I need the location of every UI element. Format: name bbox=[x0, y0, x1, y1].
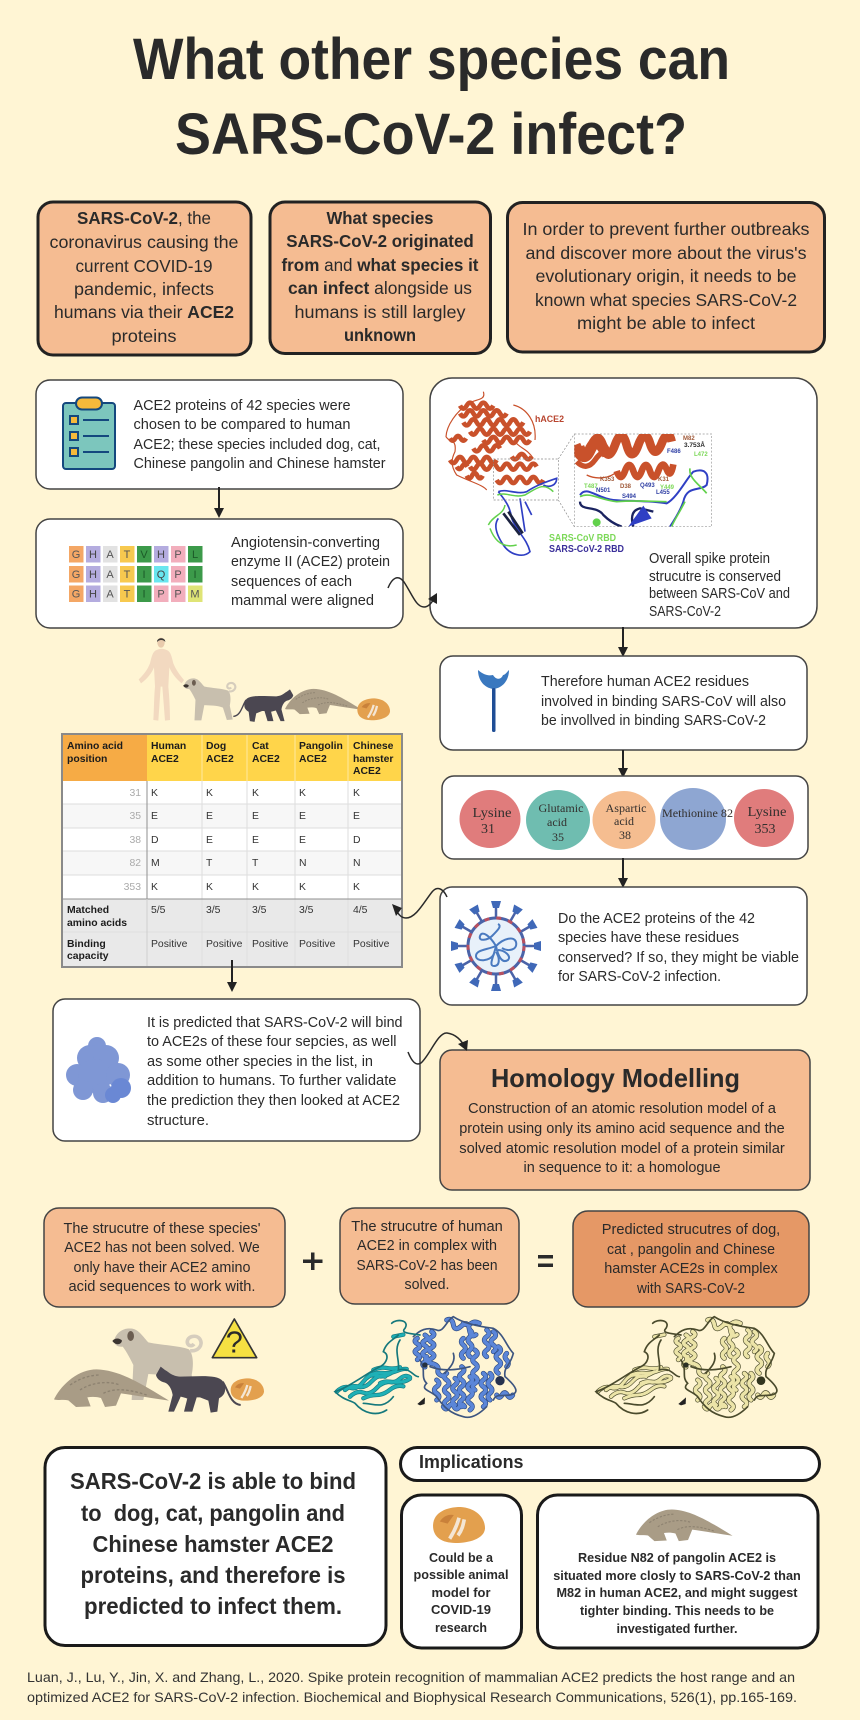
panel: unknown species: can infect alongside us bbox=[288, 278, 472, 298]
table rows: E bbox=[151, 811, 158, 822]
table rows bbox=[124, 788, 361, 893]
residue: Lysine 31 bbox=[460, 790, 520, 848]
panel: prevention rationale: evolutionary origin, it needs to be bbox=[536, 266, 796, 286]
residue: Glutamic acid 35: 35 bbox=[552, 830, 564, 844]
icon: aligned sequences: H bbox=[89, 569, 97, 581]
arrow bbox=[618, 858, 628, 888]
icon: warning question bbox=[212, 1319, 257, 1359]
table rows: M bbox=[151, 858, 160, 869]
human ACE2 ribbon bbox=[413, 1317, 516, 1417]
table header: Amino acid bbox=[67, 741, 123, 752]
panel: residues conserved question bbox=[440, 887, 807, 1005]
table rows: T bbox=[206, 858, 213, 869]
icon: aligned sequences: I bbox=[142, 569, 146, 581]
panel: SARS-CoV-2 intro bbox=[38, 202, 251, 355]
pangolin bbox=[285, 689, 362, 714]
table header: ACE2 bbox=[206, 754, 234, 765]
panel: SARS-CoV-2 intro: coronavirus causing the bbox=[50, 232, 238, 252]
illustration: predicted structure model bbox=[596, 1317, 777, 1417]
residue: Aspartic acid 38: 38 bbox=[619, 828, 631, 842]
panel: unsolved species structures: The strucutre of these species' bbox=[64, 1220, 261, 1237]
icon: aligned sequences: I bbox=[142, 588, 146, 600]
residue: Lysine 31: 31 bbox=[481, 822, 495, 837]
table summary rows: 3/5 bbox=[299, 905, 314, 916]
panel: homology modelling: in sequence to it: a homologue bbox=[524, 1159, 720, 1176]
panel: residues bbox=[442, 776, 808, 859]
panel: spike protein structure: strucutre is conserved bbox=[649, 569, 781, 585]
protein structure figure bbox=[446, 392, 712, 555]
residue: Lysine 353 bbox=[734, 789, 794, 847]
icon: protein blob bbox=[66, 1037, 131, 1103]
table header: hamster bbox=[353, 754, 393, 765]
icon: virus bbox=[451, 901, 541, 991]
panel: unknown species bbox=[270, 202, 490, 354]
panel: unknown species: SARS-CoV-2 originated bbox=[286, 231, 474, 251]
table rows: 353 bbox=[124, 882, 141, 893]
icon: aligned sequences: T bbox=[124, 569, 131, 581]
panel: prevention rationale: and discover more about the virus's bbox=[526, 243, 807, 263]
panel: hamster implication: COVID-19 bbox=[431, 1602, 491, 1617]
panel: human ACE2 residues: be invollved in binding SARS-CoV-2 bbox=[541, 712, 766, 729]
panel: pangolin implication: situated more closly to SARS-CoV-2 than bbox=[553, 1568, 801, 1583]
protein labels: Y449 bbox=[660, 485, 675, 491]
icon: aligned sequences: I bbox=[193, 569, 197, 581]
illustration: human and four animals bbox=[139, 638, 390, 722]
table summary rows: Positive bbox=[299, 939, 336, 950]
icon: ACE2 receptor bbox=[478, 670, 509, 732]
panel: prediction: to ACE2s of these four sepcies, as well bbox=[147, 1033, 396, 1050]
panel: conclusion: predicted to infect them. bbox=[84, 1593, 342, 1619]
panel: prevention rationale bbox=[508, 202, 824, 352]
panel: hamster implication: possible animal bbox=[414, 1567, 508, 1582]
panel: sequence alignment: mammal were aligned bbox=[231, 592, 374, 609]
panel: sequence alignment bbox=[36, 519, 403, 628]
table rows: 38 bbox=[129, 835, 141, 846]
protein labels: K31 bbox=[658, 477, 670, 483]
protein labels: K353 bbox=[600, 477, 615, 483]
panel: homology modelling: Construction of an atomic resolution model of a bbox=[468, 1100, 777, 1117]
table rows: E bbox=[299, 835, 306, 846]
table summary rows: amino acids bbox=[67, 918, 127, 929]
table summary rows: capacity bbox=[67, 951, 109, 962]
panel: hamster implication: model for bbox=[432, 1585, 490, 1600]
panel: conclusion: SARS-CoV-2 is able to bind bbox=[70, 1468, 356, 1494]
protein labels: Q493 bbox=[640, 483, 655, 489]
table rows: K bbox=[151, 788, 158, 799]
icon: aligned sequences: A bbox=[106, 588, 114, 600]
panel: solved human structure: SARS-CoV-2 has been bbox=[356, 1257, 498, 1274]
icon: pangolin bbox=[636, 1509, 733, 1541]
table summary rows: Positive bbox=[252, 939, 289, 950]
title: SARS-CoV-2 infect? bbox=[175, 102, 687, 167]
residue: Glutamic acid 35: acid bbox=[547, 815, 567, 829]
icon: clipboard bbox=[63, 398, 115, 469]
table summary rows: 5/5 bbox=[151, 905, 166, 916]
table rows: K bbox=[299, 788, 306, 799]
icon: aligned sequences: G bbox=[72, 549, 80, 561]
citation bbox=[27, 1669, 797, 1705]
protein labels: 3.753Å bbox=[684, 440, 705, 449]
table rows: K bbox=[299, 882, 306, 893]
panel: unknown species: unknown bbox=[344, 325, 416, 345]
panel: 42 species chosen: Chinese pangolin and Chinese hamster bbox=[134, 455, 386, 472]
panel: unknown species: from and what species it bbox=[282, 255, 479, 275]
curved arrow: residues question to table bbox=[392, 889, 447, 918]
table header: position bbox=[67, 754, 107, 765]
panel: hamster implication: Could be a bbox=[429, 1550, 494, 1565]
panel: SARS-CoV-2 intro: pandemic, infects bbox=[74, 279, 214, 299]
panel: sequence alignment: sequences of each bbox=[231, 573, 352, 590]
cat bbox=[156, 1367, 241, 1413]
panel: prediction: It is predicted that SARS-CoV-2 will bind bbox=[147, 1014, 402, 1031]
residue: Aspartic acid 38: acid bbox=[614, 814, 634, 828]
panel: prediction: structure. bbox=[147, 1112, 209, 1129]
panel: unsolved species structures: only have their ACE2 amino bbox=[74, 1259, 250, 1276]
table header: ACE2 bbox=[151, 754, 179, 765]
curved arrow: prediction to homology bbox=[408, 1033, 468, 1064]
residue: Lysine 353: Lysine bbox=[748, 805, 786, 820]
table rows: D bbox=[151, 835, 159, 846]
plus sign bbox=[303, 1252, 322, 1270]
protein labels: L472 bbox=[694, 452, 708, 458]
table header: ACE2 bbox=[252, 754, 280, 765]
icon: hamster bbox=[433, 1507, 485, 1543]
table rows: K bbox=[206, 882, 213, 893]
panel: predicted structures: Predicted strucutres of dog, bbox=[602, 1221, 780, 1238]
residue: Aspartic acid 38: Aspartic bbox=[606, 801, 646, 815]
table rows: K bbox=[353, 788, 360, 799]
panel: pangolin implication: Residue N82 of pangolin ACE2 is bbox=[578, 1550, 776, 1565]
panel: unsolved species structures: ACE2 has not been solved. We bbox=[64, 1239, 260, 1256]
table rows: E bbox=[252, 835, 259, 846]
panel: predicted structures bbox=[573, 1211, 809, 1307]
panel: SARS-CoV-2 intro: SARS-CoV-2, the bbox=[77, 208, 211, 228]
panel: SARS-CoV-2 intro: current COVID-19 bbox=[76, 256, 212, 276]
table summary rows: Positive bbox=[151, 939, 188, 950]
panel: unsolved species structures bbox=[44, 1208, 285, 1307]
panel: prevention rationale: known what species SARS-CoV-2 bbox=[535, 290, 797, 310]
panel: spike protein structure: SARS-CoV-2 bbox=[649, 604, 721, 620]
table summary rows: Positive bbox=[353, 939, 390, 950]
table: amino acid comparison bbox=[62, 734, 402, 967]
table rows: E bbox=[299, 811, 306, 822]
heading: implications: Implications bbox=[419, 1451, 524, 1472]
residue: Methionine 82 bbox=[660, 788, 733, 850]
panel: solved human structure: The strucutre of human bbox=[351, 1218, 503, 1235]
icon: aligned sequences: M bbox=[190, 588, 200, 600]
icon: aligned sequences: H bbox=[157, 549, 165, 561]
title bbox=[133, 27, 730, 167]
panel: prediction: as some other species in the list, in bbox=[147, 1053, 373, 1070]
table header: ACE2 bbox=[353, 766, 381, 777]
panel: human ACE2 residues: Therefore human ACE2 residues bbox=[541, 673, 749, 690]
residue: Aspartic acid 38 bbox=[592, 791, 656, 849]
curved arrow: alignment to structure bbox=[388, 578, 437, 607]
panel: 42 species chosen bbox=[36, 380, 403, 489]
panel: spike protein structure: Overall spike protein bbox=[649, 551, 770, 567]
panel: SARS-CoV-2 intro: humans via their ACE2 bbox=[54, 302, 234, 322]
table rows: K bbox=[206, 788, 213, 799]
panel: pangolin implication bbox=[538, 1495, 818, 1648]
panel: homology modelling: solved atomic resolution model of a protein similar bbox=[459, 1140, 785, 1157]
icon: aligned sequences: G bbox=[72, 569, 80, 581]
residue: Lysine 31: Lysine bbox=[472, 806, 512, 821]
table summary rows: 3/5 bbox=[252, 905, 267, 916]
icon: aligned sequences: P bbox=[174, 588, 182, 600]
panel: solved human structure bbox=[340, 1208, 519, 1304]
panel: solved human structure: solved. bbox=[404, 1276, 450, 1293]
illustration: animals with unknown structure bbox=[54, 1319, 264, 1413]
panel: 42 species chosen: ACE2 proteins of 42 species were bbox=[134, 397, 350, 414]
arrow bbox=[618, 750, 628, 778]
panel: hamster implication: research bbox=[435, 1620, 487, 1635]
panel: pangolin implication: M82 in human ACE2, and might suggest bbox=[556, 1585, 798, 1600]
table header: Cat bbox=[252, 741, 269, 752]
icon: aligned sequences: H bbox=[89, 588, 97, 600]
protein labels: F486 bbox=[667, 449, 681, 455]
equals sign bbox=[538, 1255, 553, 1267]
protein labels bbox=[535, 414, 708, 555]
citation: Luan, J., Lu, Y., Jin, X. and Zhang, L., 2020. Spike protein recognition of mammalian ACE2 predicts the host range and an bbox=[27, 1669, 795, 1685]
panel: 42 species chosen: chosen to be compared to human bbox=[134, 416, 350, 433]
panel: homology modelling bbox=[440, 1050, 810, 1190]
icon: aligned sequences: T bbox=[124, 588, 131, 600]
panel: prevention rationale: In order to prevent further outbreaks bbox=[522, 219, 810, 239]
table summary rows: 3/5 bbox=[206, 905, 221, 916]
table summary rows: 4/5 bbox=[353, 905, 368, 916]
panel: prediction: addition to humans. To further validate bbox=[147, 1072, 396, 1089]
table rows: 35 bbox=[129, 811, 141, 822]
panel: residues conserved question: species have these residues bbox=[558, 929, 739, 946]
panel: unsolved species structures: acid sequences to work with. bbox=[68, 1278, 256, 1295]
panel: spike protein structure: between SARS-CoV and bbox=[649, 586, 790, 602]
panel: pangolin implication: tighter binding. This needs to be bbox=[580, 1603, 774, 1618]
panel: predicted structures: hamster ACE2s in complex bbox=[604, 1260, 778, 1277]
table header: Human bbox=[151, 741, 186, 752]
icon: aligned sequences: P bbox=[174, 569, 182, 581]
icon: aligned sequences bbox=[69, 546, 202, 602]
panel: prediction: the prediction they then looked at ACE2 bbox=[147, 1092, 400, 1109]
human bbox=[139, 638, 184, 721]
panel: 42 species chosen: ACE2; these species included dog, cat, bbox=[134, 436, 380, 453]
protein labels: SARS-CoV RBD bbox=[549, 533, 616, 544]
dog bbox=[183, 678, 235, 720]
panel: sequence alignment: Angiotensin-converting bbox=[231, 534, 380, 551]
icon: aligned sequences: Q bbox=[157, 569, 166, 581]
predicted ribbon bbox=[596, 1317, 777, 1417]
table rows: E bbox=[353, 811, 360, 822]
residue: Methionine 82: Methionine 82 bbox=[662, 806, 733, 820]
panel: human ACE2 residues: involved in binding SARS-CoV will also bbox=[541, 693, 786, 710]
panel: conclusion bbox=[45, 1448, 386, 1646]
panel: predicted structures: cat , pangolin and Chinese bbox=[607, 1241, 775, 1258]
panel: hamster implication bbox=[402, 1495, 522, 1648]
cat bbox=[233, 689, 293, 722]
table header: ACE2 bbox=[299, 754, 327, 765]
table rows: K bbox=[252, 788, 259, 799]
table rows: N bbox=[299, 858, 307, 869]
table summary rows: Matched bbox=[67, 905, 109, 916]
protein labels: S494 bbox=[622, 494, 637, 500]
table summary rows: Positive bbox=[206, 939, 243, 950]
panel: sequence alignment: enzyme II (ACE2) protein bbox=[231, 553, 390, 570]
icon: aligned sequences: P bbox=[174, 549, 182, 561]
icon: aligned sequences: L bbox=[192, 549, 198, 561]
hamster bbox=[231, 1378, 264, 1401]
protein labels: L455 bbox=[656, 490, 670, 496]
panel: conclusion: to dog, cat, pangolin and bbox=[81, 1500, 345, 1526]
heading: implications bbox=[400, 1448, 820, 1480]
arrow bbox=[214, 487, 224, 518]
icon: aligned sequences: A bbox=[106, 549, 114, 561]
table header: Chinese bbox=[353, 741, 394, 752]
table rows: K bbox=[252, 882, 259, 893]
residue: Glutamic acid 35 bbox=[526, 790, 590, 850]
icon: aligned sequences: T bbox=[124, 549, 131, 561]
panel: prevention rationale: might be able to infect bbox=[577, 313, 755, 333]
panel: pangolin implication: investigated further. bbox=[616, 1621, 738, 1636]
illustration: human ACE2 with SARS-CoV-2 bbox=[335, 1317, 516, 1417]
panel: prediction bbox=[53, 999, 420, 1141]
table rows: K bbox=[151, 882, 158, 893]
panel: human ACE2 residues bbox=[440, 656, 807, 750]
panel: unknown species: What species bbox=[326, 208, 434, 228]
arrow bbox=[618, 627, 628, 657]
panel: homology modelling: Homology Modelling bbox=[491, 1063, 740, 1093]
residue: Lysine 353: 353 bbox=[754, 822, 776, 837]
panel: predicted structures: with SARS-CoV-2 bbox=[636, 1280, 745, 1297]
table summary rows bbox=[67, 905, 390, 962]
dog bbox=[112, 1328, 201, 1400]
icon: aligned sequences: H bbox=[89, 549, 97, 561]
table rows: K bbox=[353, 882, 360, 893]
panel: conclusion: Chinese hamster ACE2 bbox=[92, 1531, 334, 1557]
panel: SARS-CoV-2 intro: proteins bbox=[112, 326, 177, 346]
icon: aligned sequences: V bbox=[140, 549, 148, 561]
panel: solved human structure: ACE2 in complex with bbox=[357, 1237, 497, 1254]
pangolin bbox=[54, 1369, 169, 1407]
citation: optimized ACE2 for SARS-CoV-2 infection. Biochemical and Biophysical Research Communications, 526(1), pp.165-169. bbox=[27, 1689, 797, 1705]
spike RBD ribbon bbox=[335, 1321, 420, 1413]
icon: warning question: ? bbox=[226, 1325, 243, 1359]
hamster bbox=[357, 698, 390, 720]
protein labels: M82 bbox=[683, 436, 695, 442]
panel: residues conserved question: for SARS-CoV-2 infection. bbox=[558, 968, 721, 985]
table header: Pangolin bbox=[299, 741, 343, 752]
panel: homology modelling: protein using only its amino acid sequence and the bbox=[459, 1120, 785, 1137]
protein labels: T487 bbox=[584, 484, 598, 490]
table rows: T bbox=[252, 858, 259, 869]
residue: Glutamic acid 35: Glutamic bbox=[538, 801, 584, 815]
arrow bbox=[227, 960, 237, 992]
table header bbox=[67, 741, 394, 777]
table rows: 31 bbox=[129, 788, 141, 799]
panel: spike protein structure bbox=[430, 378, 817, 628]
icon: aligned sequences: G bbox=[72, 588, 80, 600]
table summary rows: Binding bbox=[67, 939, 106, 950]
protein labels: SARS-CoV-2 RBD bbox=[549, 544, 624, 555]
title: What other species can bbox=[133, 27, 730, 92]
panel: unknown species: humans is still largley bbox=[294, 302, 466, 322]
table rows: 82 bbox=[129, 858, 141, 869]
protein labels: hACE2 bbox=[535, 414, 564, 425]
table rows: N bbox=[353, 858, 361, 869]
panel: residues conserved question: conserved? If so, they might be viable bbox=[558, 949, 799, 966]
protein labels: N501 bbox=[596, 488, 611, 494]
panel: residues conserved question: Do the ACE2 proteins of the 42 bbox=[558, 910, 755, 927]
table rows: D bbox=[353, 835, 361, 846]
icon: aligned sequences: P bbox=[157, 588, 165, 600]
table header: Dog bbox=[206, 741, 226, 752]
icon: aligned sequences: A bbox=[106, 569, 114, 581]
table rows: E bbox=[206, 835, 213, 846]
table rows: E bbox=[252, 811, 259, 822]
panel: conclusion: proteins, and therefore is bbox=[80, 1562, 346, 1588]
protein labels: D38 bbox=[620, 484, 632, 490]
table rows: E bbox=[206, 811, 213, 822]
